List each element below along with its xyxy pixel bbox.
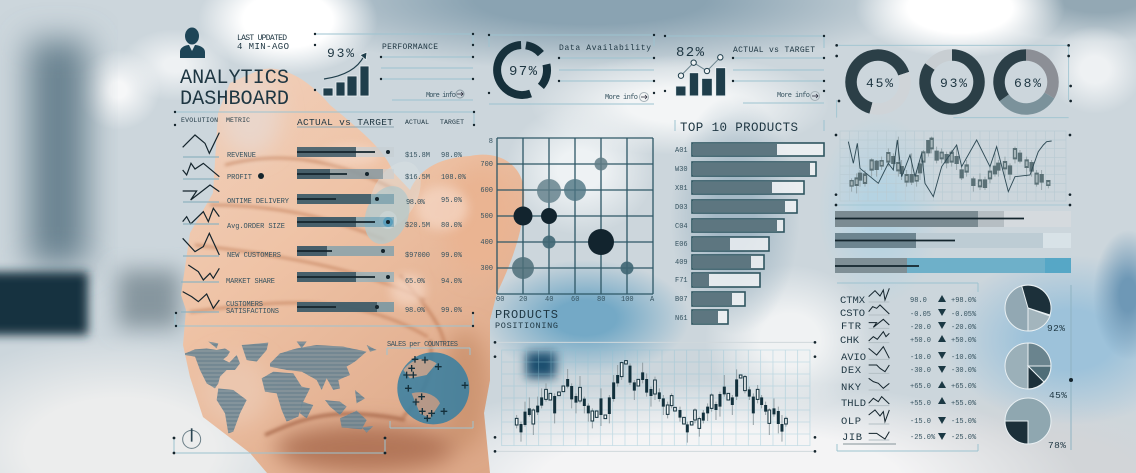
axis labels: 00 [496, 296, 504, 304]
hollow bodies [515, 361, 787, 428]
panel: world map [173, 341, 473, 454]
values: +65.0 [910, 383, 931, 391]
product codes: A01 [675, 147, 688, 155]
actual and target values: 65.0% [405, 278, 426, 286]
metric labels: REVENUE [227, 152, 256, 160]
metric labels: PROFIT [227, 174, 252, 182]
values [910, 297, 977, 442]
bar 3 [835, 258, 1071, 273]
values: -0.05 [910, 311, 931, 319]
ticker names: FTR [841, 321, 862, 333]
axis labels: 20 [519, 296, 527, 304]
line series [848, 140, 1052, 197]
pie 92% [1005, 285, 1051, 331]
values: 98.0 [910, 297, 927, 305]
donut value: 97% [509, 64, 538, 80]
dark bodies [521, 366, 782, 432]
values: -10.0% [951, 354, 977, 362]
bar chart: top 10 products [675, 120, 824, 324]
actual and target values: 80.0% [441, 222, 463, 230]
more info: More info [426, 92, 456, 100]
chart title: PRODUCTS [495, 308, 558, 322]
metric labels: CUSTOMERS [226, 301, 263, 309]
last updated note: 4 MIN-AGO [237, 42, 289, 52]
product codes: C04 [675, 223, 688, 231]
gauge 45%: 45% [866, 76, 893, 91]
metric labels [226, 152, 290, 316]
axis labels: 60 [571, 296, 579, 304]
more info: More info [605, 94, 638, 102]
globe with markers [397, 352, 469, 424]
ticker names: CSTO [840, 308, 865, 320]
axis labels: 300 [480, 265, 493, 273]
actual and target values: 98.0% [406, 199, 426, 207]
pie 45% [1005, 343, 1051, 389]
actual and target values: $15.8M [405, 152, 430, 160]
values: -0.05% [951, 311, 977, 319]
metric labels: ONTIME DELIVERY [227, 198, 290, 206]
panel: stock list [837, 283, 978, 451]
axis labels: 80 [597, 296, 605, 304]
panel: performance [314, 33, 474, 100]
ticker names: DEX [841, 365, 862, 377]
pen tip [356, 153, 431, 251]
panel: 82% actual vs target [664, 35, 825, 103]
product codes: B07 [675, 296, 688, 304]
ticker names [840, 295, 866, 444]
arrows [938, 295, 946, 440]
values: +65.0% [951, 383, 977, 391]
chart title: POSITIONING [495, 321, 558, 331]
bars [692, 143, 824, 324]
hand holding pen [175, 60, 530, 473]
icon: user [180, 28, 205, 58]
product codes: E06 [675, 241, 688, 249]
actual and target values: 99.0% [441, 307, 463, 315]
metric labels: NEW CUSTOMERS [227, 252, 281, 260]
grid [502, 350, 810, 446]
actual and target values [405, 152, 467, 315]
axis labels: 100 [621, 296, 634, 304]
pie charts [1005, 285, 1073, 451]
underlines [869, 302, 889, 440]
metric labels: MARKET SHARE [226, 278, 275, 286]
ticker names: NKY [841, 382, 862, 394]
gauge 45% [851, 55, 905, 109]
product codes: W30 [675, 166, 688, 174]
values: -30.0 [910, 367, 931, 375]
actual and target values: 98.0% [405, 307, 426, 315]
actual and target values: $16.5M [405, 174, 430, 182]
ticker names: JIB [842, 432, 862, 444]
pie values [1047, 323, 1067, 451]
donut gauges [851, 55, 1053, 109]
bar 2 [835, 233, 1071, 248]
axis labels: 8 [489, 138, 493, 146]
metric labels: Avg.ORDER SIZE [227, 223, 285, 231]
ticker names: CHK [840, 335, 860, 347]
chart title [495, 308, 558, 331]
table headers: ACTUAL [405, 119, 429, 126]
axis labels [480, 138, 655, 304]
axis labels: 600 [480, 187, 493, 195]
candlestick chart [494, 341, 816, 453]
actual and target values: $97000 [405, 252, 430, 260]
icon: bars with trend [676, 55, 726, 96]
ticker names: THLD [841, 398, 866, 410]
icon: rising bars [323, 52, 369, 96]
gauge 68%: 68% [1014, 76, 1041, 91]
values: -15.0% [951, 418, 977, 426]
title: ANALYTICS [180, 67, 289, 90]
donut 97% [497, 45, 547, 95]
panel: data availability [488, 34, 655, 104]
actual and target values: 95.0% [441, 197, 463, 205]
values: -30.0% [951, 367, 977, 375]
values: -15.0 [910, 418, 931, 426]
pie values: 78% [1048, 440, 1066, 451]
table headers [181, 117, 464, 128]
value: 82% [676, 45, 705, 61]
blurred background shapes [0, 40, 556, 378]
bullet bars [297, 147, 394, 312]
table headers: METRIC [226, 117, 250, 124]
values: +50.0% [951, 337, 977, 345]
actual and target values: 99.0% [441, 252, 463, 260]
ticker names: OLP [841, 416, 861, 428]
values: +55.0% [951, 400, 977, 408]
last updated note [237, 34, 289, 52]
actual and target values: $20.5M [405, 222, 430, 230]
last updated note: LAST UPDATED [237, 34, 287, 43]
values: -20.0 [910, 324, 931, 332]
axis labels: 500 [480, 213, 493, 221]
pie values: 45% [1049, 390, 1067, 401]
scatter chart: products positioning [480, 138, 655, 331]
heading: ACTUAL vs TARGET [733, 46, 815, 55]
heading: Data Availability [559, 44, 651, 53]
map continents [185, 342, 377, 433]
grid [840, 131, 1066, 201]
product codes [675, 147, 688, 323]
wicks [517, 362, 786, 443]
panel: candlestick and line chart [835, 44, 1072, 206]
values: -25.0% [951, 434, 977, 442]
ticker names: AVIO [841, 352, 866, 364]
bar 1 [835, 211, 1071, 227]
table headers: ACTUAL vs TARGET [297, 117, 393, 128]
bubbles [512, 158, 634, 279]
table headers: EVOLUTION [181, 117, 218, 124]
axis labels: 700 [480, 161, 493, 169]
actual and target values: 108.0% [441, 174, 467, 182]
gauge 68% [999, 55, 1053, 109]
performance value: 93% [327, 46, 354, 61]
more info: More info [777, 92, 810, 100]
values: -10.0 [910, 354, 931, 362]
heading: TOP 10 PRODUCTS [680, 121, 798, 135]
values: -25.0% [910, 434, 936, 442]
ticker sparklines [869, 288, 889, 439]
icon: power button [183, 428, 201, 448]
values: +98.0% [951, 297, 977, 305]
gauge 93% [925, 55, 979, 109]
axis labels: A [650, 296, 655, 304]
performance heading: PERFORMANCE [382, 43, 438, 52]
axis labels: 400 [480, 239, 493, 247]
product codes: N61 [675, 315, 688, 323]
gauge 93%: 93% [940, 76, 967, 91]
candles [852, 137, 1048, 193]
title [180, 67, 289, 111]
panel: actual vs target table [174, 111, 475, 327]
pie 78% [1005, 398, 1051, 444]
more info [426, 90, 464, 100]
product codes: D03 [675, 204, 688, 212]
axis labels: 40 [545, 296, 553, 304]
values: -20.0% [951, 324, 977, 332]
more info [777, 92, 820, 100]
pie values: 92% [1047, 323, 1065, 334]
product codes: F71 [675, 277, 688, 285]
product codes: X81 [675, 185, 688, 193]
panel: bullet bars right [835, 211, 1071, 273]
table headers: TARGET [440, 119, 464, 126]
sales heading: SALES per COUNTRIES [387, 341, 458, 349]
values: +50.0 [910, 337, 931, 345]
product codes: 409 [675, 259, 688, 267]
ticker names: CTMX [840, 295, 866, 307]
metric labels: SATISFACTIONS [226, 308, 279, 316]
actual and target values: 98.0% [441, 152, 463, 160]
values: +55.0 [910, 400, 931, 408]
sparklines [183, 133, 219, 308]
actual and target values: 94.0% [441, 278, 463, 286]
more info [605, 92, 648, 102]
title: DASHBOARD [180, 88, 289, 111]
